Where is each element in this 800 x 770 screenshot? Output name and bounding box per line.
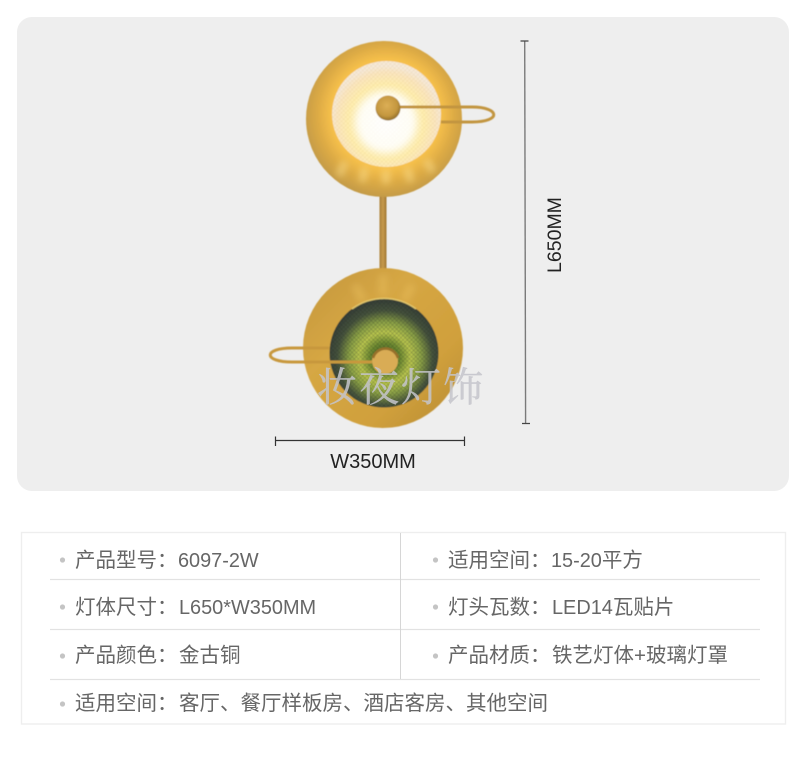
spec: size: L650*W350MM [179, 597, 316, 619]
spec: applicable area: 15-20平方 [551, 549, 643, 572]
spec: material: 铁艺灯体+玻璃灯罩 [552, 644, 728, 667]
dimension: width: W350MM [330, 451, 416, 473]
spec: usage spaces: 适用空间： [75, 692, 178, 715]
spec: model: 产品型号： [75, 549, 178, 572]
spec: wattage [433, 596, 674, 619]
spec: material: 产品材质： [448, 644, 550, 667]
dimension: height [520, 41, 566, 424]
upper lamp disc, lit [306, 41, 494, 197]
lower lamp disc, green glass [270, 268, 463, 428]
panel: product photo background [17, 17, 789, 491]
spec: material [433, 644, 728, 667]
spec: size [60, 596, 316, 619]
spec: applicable area [433, 549, 643, 572]
spec: applicable area: 适用空间： [448, 549, 550, 572]
spec: usage spaces: 客厅、餐厅样板房、酒店客房、其他空间 [179, 692, 548, 715]
watermark: 妆夜灯饰 [317, 365, 485, 410]
spec: colour: 金古铜 [179, 644, 240, 667]
spec: colour [60, 644, 241, 667]
spec: model [60, 549, 259, 572]
wall lamp illustration [270, 41, 494, 428]
dimension: height: L650MM [544, 197, 566, 273]
spec: wattage: 灯头瓦数： [448, 596, 550, 619]
specification table [22, 532, 786, 724]
spec: size: 灯体尺寸： [75, 596, 178, 619]
lamp stem [380, 195, 386, 270]
spec: model: 6097-2W [178, 550, 259, 572]
spec: wattage: LED14瓦贴片 [552, 596, 674, 619]
dimension: width [276, 436, 464, 473]
spec: colour: 产品颜色： [75, 644, 178, 667]
